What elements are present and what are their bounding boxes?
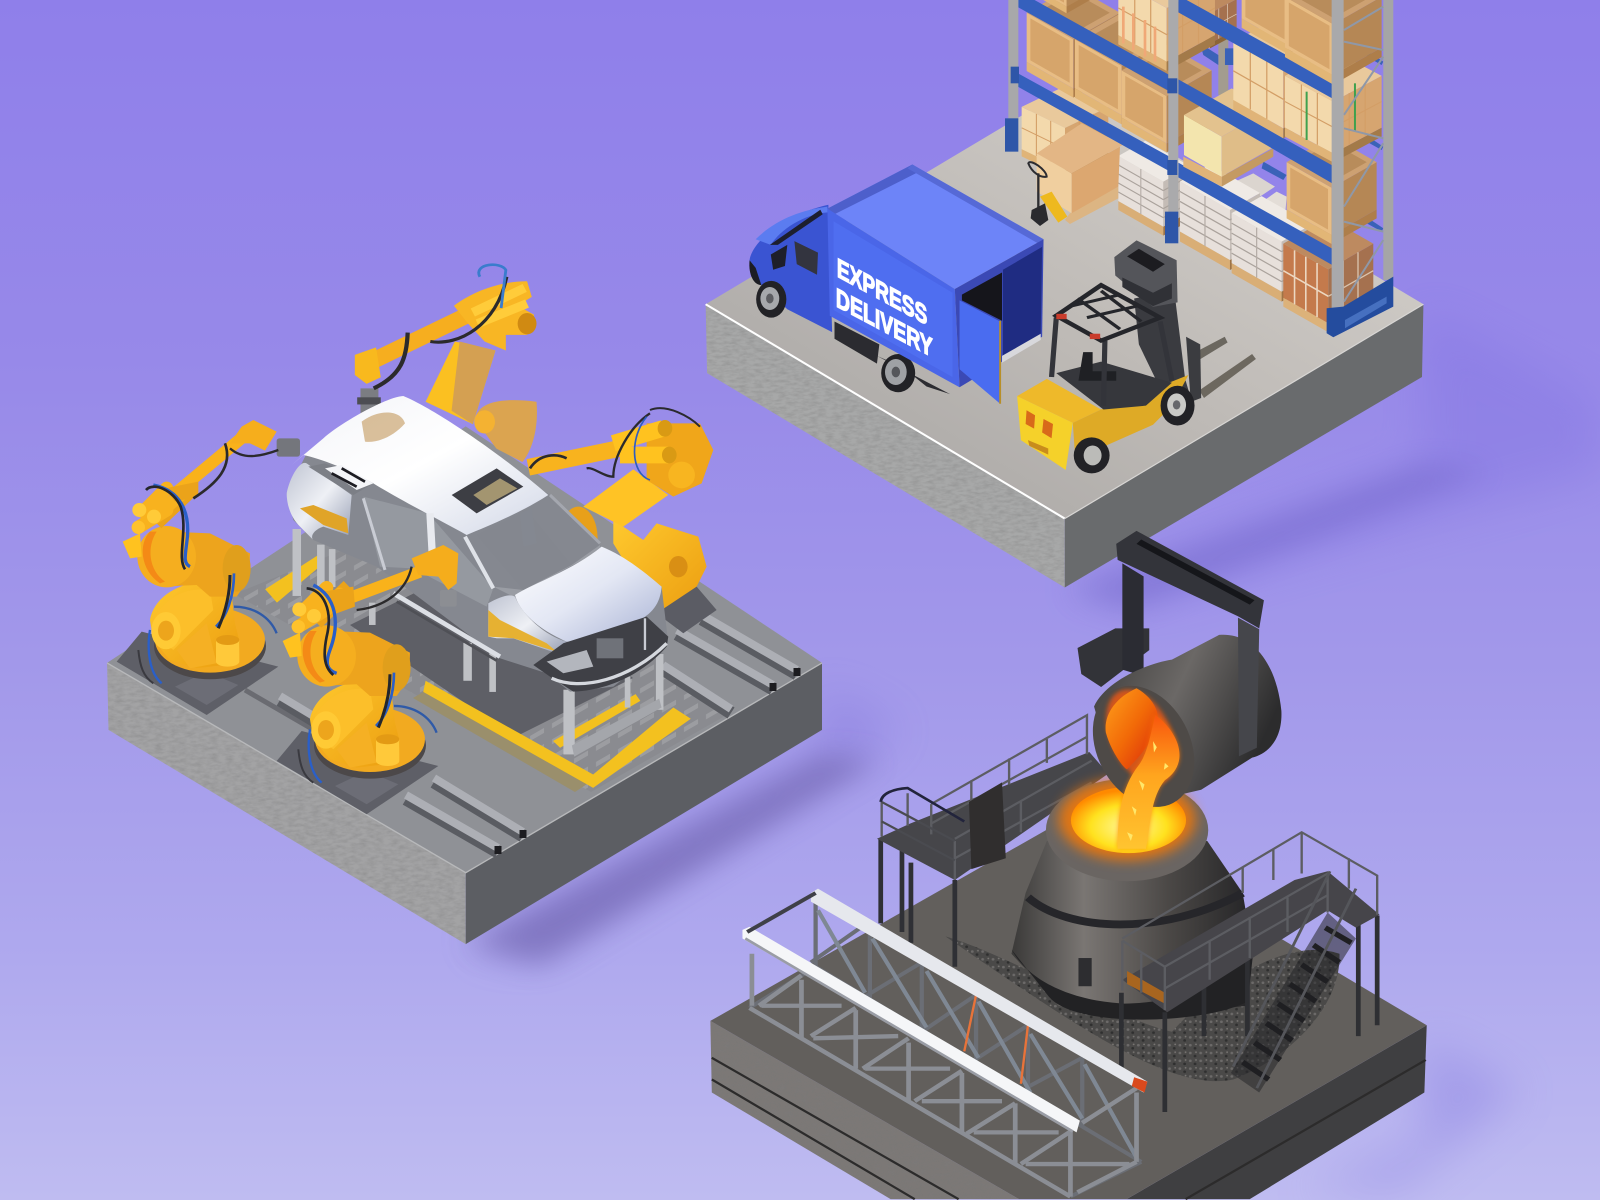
pallet rack with goods [1005,0,1393,337]
robot arm: front [277,545,458,814]
converter vessel [1011,778,1253,1020]
goods on middle level [1027,0,1377,244]
ladle hanger rear post [1078,563,1149,687]
scene: steel foundry [710,531,1427,1199]
goods below lowest beam [1022,86,1373,332]
right walkway and stairs [1121,832,1380,1112]
scene: warehouse and delivery [706,0,1423,587]
robot arm: left [117,420,300,715]
robot arm: rear [355,265,537,462]
yellow safety frame [265,556,691,788]
steel truss [742,889,1147,1197]
goods on upper level [1033,0,1382,162]
robot arm: right [528,408,717,633]
robot platform base [107,426,822,944]
ladle hanger front post and beam [1116,531,1264,756]
truck side lettering: EXPRESS [837,253,927,332]
warehouse platform base [706,90,1423,587]
goods on top level [1242,0,1382,85]
floor plates and rails [234,500,797,854]
pallet truck [1028,162,1067,226]
platform shadows [466,310,1600,1190]
rack uprights [1005,0,1393,337]
molten metal stream [1118,715,1180,849]
forklift [1017,240,1256,473]
robot arms: left and front [117,420,458,814]
car body [287,396,668,692]
foundry platform base [710,815,1427,1199]
scene: robotic car assembly [107,265,822,944]
delivery truck [749,165,1044,404]
slag gravel [945,936,1340,1081]
left walkway [877,715,1108,967]
tilting ladle [1074,635,1281,821]
truck side lettering: DELIVERY [836,283,933,364]
car stand posts [293,529,663,757]
